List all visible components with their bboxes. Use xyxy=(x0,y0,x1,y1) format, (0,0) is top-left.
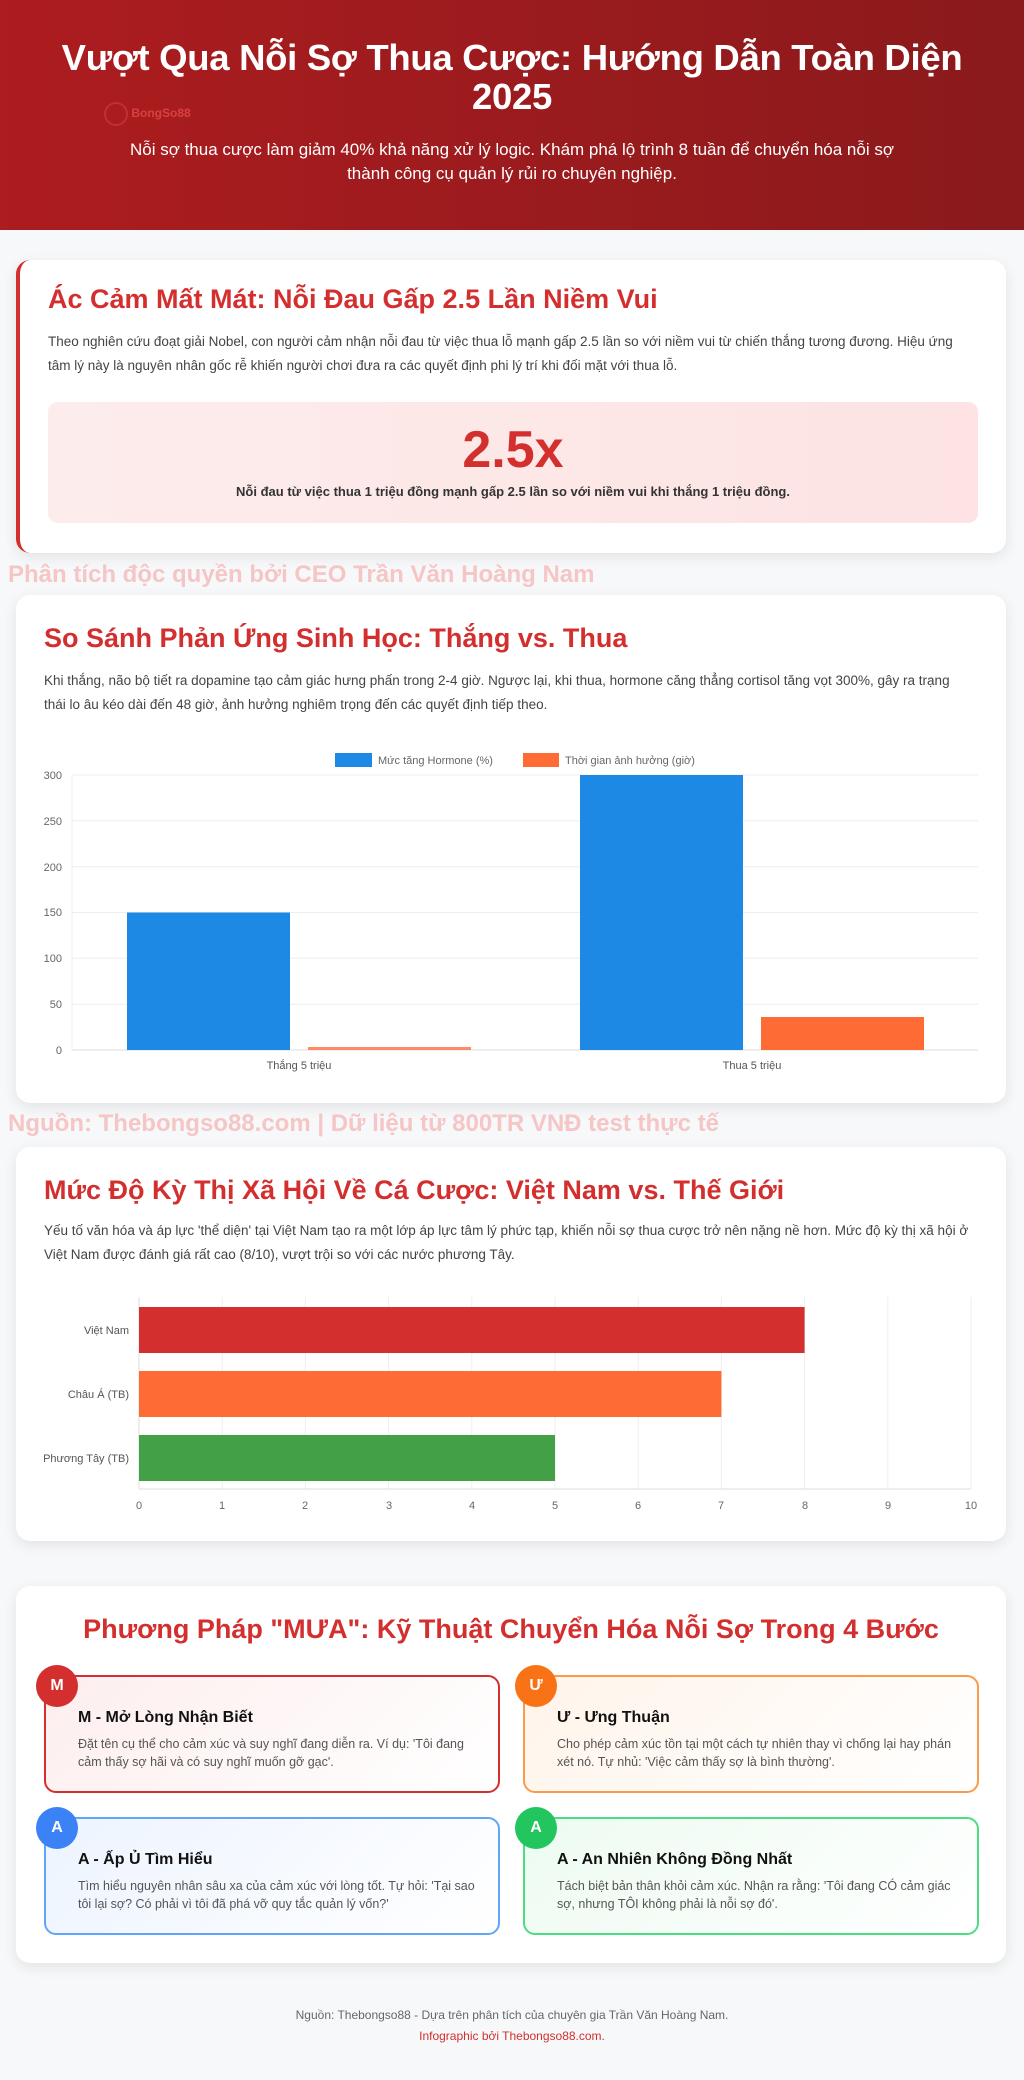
heading: Ác Cảm Mất Mát: Nỗi Đau Gấp 2.5 Lần Niềm Vui xyxy=(48,284,658,314)
text block: Khi thắng, não bộ tiết ra dopamine tạo cảm giác hưng phấn trong 2-4 giờ. Ngược lại, khi thua, hormone căng thẳng cortisol tăng vọt 300%, gây ra trạng thái lo âu kéo dài đến 48 giờ, ảnh hưởng nghiêm trọng đến các quyết định tiếp theo. xyxy=(44,673,950,712)
legend: Mức tăng Hormone (%) xyxy=(378,755,493,767)
header xyxy=(0,0,1024,230)
step U xyxy=(523,1675,979,1793)
logo xyxy=(104,102,191,126)
icon: A green xyxy=(515,1807,557,1849)
horizontal bar chart: stigma: 6 xyxy=(635,1500,641,1512)
watermark 2: Nguồn: Thebongso88.com | Dữ liệu từ 800TR VNĐ test thực tế xyxy=(8,1110,719,1137)
step A2: A - An Nhiên Không Đồng Nhất xyxy=(557,1851,792,1868)
bar chart: hormone: 150 xyxy=(44,907,62,919)
footer: Nguồn: Thebongso88 - Dựa trên phân tích của chuyên gia Trần Văn Hoàng Nam. xyxy=(296,2008,728,2022)
step U: Cho phép cảm xúc tồn tại một cách tự nhiên thay vì chống lại hay phán xét nó. Tự nhủ: 'Việc cảm thấy sợ là bình thường'. xyxy=(557,1737,951,1769)
footer: Infographic bởi Thebongso88.com. xyxy=(419,2029,605,2043)
horizontal bar chart: stigma: 0 xyxy=(136,1500,142,1512)
step A2: Tách biệt bản thân khỏi cảm xúc. Nhận ra rằng: 'Tôi đang CÓ cảm giác sợ, nhưng TÔI không phải là nỗi sợ đó'. xyxy=(557,1879,951,1911)
footer xyxy=(296,2008,728,2043)
heading: Phương Pháp "MƯA": Kỹ Thuật Chuyển Hóa Nỗi Sợ Trong 4 Bước xyxy=(83,1614,939,1644)
bar chart: hormone xyxy=(44,753,978,1072)
icon: M: M xyxy=(50,1677,64,1694)
stat callout xyxy=(48,402,978,523)
step M: Đặt tên cụ thể cho cảm xúc và suy nghĩ đang diễn ra. Ví dụ: 'Tôi đang cảm thấy sợ hãi và có suy nghĩ muốn gỡ gạc'. xyxy=(78,1737,464,1769)
heading: So Sánh Phản Ứng Sinh Học: Thắng vs. Thua xyxy=(44,623,627,653)
bar chart: hormone: 300 xyxy=(44,770,62,782)
bar chart: hormone: Thắng 5 triệu xyxy=(267,1059,331,1072)
horizontal bar chart: stigma: Châu Á (TB) xyxy=(68,1388,129,1401)
horizontal bar chart: stigma: Phương Tây (TB) xyxy=(43,1453,129,1465)
icon: U xyxy=(515,1665,557,1707)
panel: biological response xyxy=(16,595,1006,1103)
text block: Theo nghiên cứu đoạt giải Nobel, con người cảm nhận nỗi đau từ việc thua lỗ mạnh gấp 2.5 lần so với niềm vui từ chiến thắng tương đương. Hiệu ứng tâm lý này là nguyên nhân gốc rễ khiến người chơi đưa ra các quyết định phi lý trí khi đối mặt với thua lỗ. xyxy=(48,334,953,373)
title: Vượt Qua Nỗi Sợ Thua Cược: Hướng Dẫn Toàn Diện xyxy=(62,37,962,78)
icon: A blue: A xyxy=(51,1819,63,1836)
horizontal bar chart: stigma: 5 xyxy=(552,1500,558,1512)
logo: BongSo88 xyxy=(131,106,191,120)
bar chart: hormone: 100 xyxy=(44,953,62,965)
icon: U: Ư xyxy=(529,1677,543,1694)
step A1: A - Ấp Ủ Tìm Hiểu xyxy=(78,1851,213,1868)
horizontal bar chart: stigma: 1 xyxy=(219,1500,225,1512)
horizontal bar chart: stigma: 9 xyxy=(885,1500,891,1512)
icon: M xyxy=(36,1665,78,1707)
bars xyxy=(127,775,924,1050)
legend: Thời gian ảnh hưởng (giờ) xyxy=(565,755,695,767)
title: 2025 xyxy=(472,76,552,117)
step A1: Tìm hiểu nguyên nhân sâu xa của cảm xúc với lòng tốt. Tự hỏi: 'Tại sao tôi lại sợ? Có phải vì tôi đã phá vỡ quy tắc quản lý vốn?' xyxy=(78,1879,475,1911)
horizontal bar chart: stigma: 10 xyxy=(965,1500,977,1512)
subtitle: Nỗi sợ thua cược làm giảm 40% khả năng xử lý logic. Khám phá lộ trình 8 tuần để chuyển hóa nỗi sợ thành công cụ quản lý rủi ro chuyên nghiệp. xyxy=(130,140,894,183)
panel: MUA method xyxy=(16,1586,1006,1963)
icon: A green: A xyxy=(530,1819,542,1836)
horizontal bar chart: stigma: 4 xyxy=(469,1500,475,1512)
horizontal bar chart: stigma: 2 xyxy=(302,1500,308,1512)
icon: A blue xyxy=(36,1807,78,1849)
horizontal bar chart: stigma: Việt Nam xyxy=(84,1325,129,1337)
horizontal bar chart: stigma: 8 xyxy=(802,1500,808,1512)
panel: social stigma xyxy=(16,1147,1006,1541)
step A1 xyxy=(44,1817,500,1935)
heading: Mức Độ Kỳ Thị Xã Hội Về Cá Cược: Việt Nam vs. Thế Giới xyxy=(44,1175,784,1205)
bars xyxy=(139,1307,805,1481)
horizontal bar chart: stigma: 3 xyxy=(386,1500,392,1512)
bar chart: hormone: Thua 5 triệu xyxy=(723,1060,781,1072)
bar chart: hormone: 0 xyxy=(56,1045,62,1057)
legend xyxy=(335,753,695,767)
text block: Yếu tố văn hóa và áp lực 'thể diện' tại Việt Nam tạo ra một lớp áp lực tâm lý phức tạp, khiến nỗi sợ thua cược trở nên nặng nề hơn. Mức độ kỳ thị xã hội ở Việt Nam được đánh giá rất cao (8/10), vượt trội so với các nước phương Tây. xyxy=(44,1223,968,1262)
title xyxy=(62,37,962,117)
stat callout: Nỗi đau từ việc thua 1 triệu đồng mạnh gấp 2.5 lần so với niềm vui khi thắng 1 triệu đồng. xyxy=(236,484,790,499)
step U: Ư - Ưng Thuận xyxy=(557,1709,670,1726)
horizontal bar chart: stigma: 7 xyxy=(718,1500,724,1512)
watermark 1: Phân tích độc quyền bởi CEO Trần Văn Hoàng Nam xyxy=(8,561,594,588)
panel: loss aversion xyxy=(16,260,1006,553)
step M xyxy=(44,1675,500,1793)
step A2 xyxy=(523,1817,979,1935)
bar chart: hormone: 250 xyxy=(44,816,62,828)
stat callout: 2.5x xyxy=(462,421,564,479)
bar chart: hormone: 50 xyxy=(50,999,62,1011)
bar chart: hormone: 200 xyxy=(44,862,62,874)
horizontal bar chart: stigma xyxy=(43,1297,977,1512)
step M: M - Mở Lòng Nhận Biết xyxy=(78,1709,253,1726)
